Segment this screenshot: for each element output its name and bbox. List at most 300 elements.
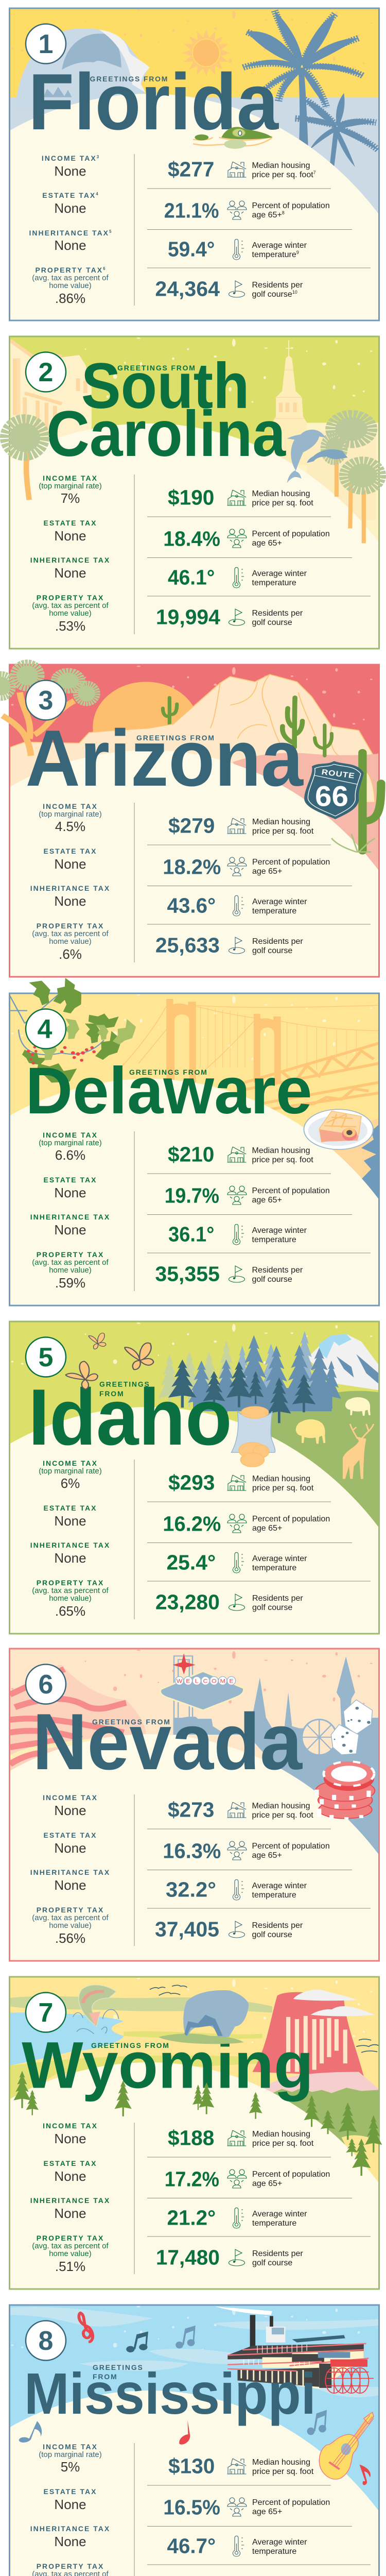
income tax: INCOME TAX — [43, 2122, 98, 2130]
icon: holly branch — [10, 976, 140, 1092]
tax column: .53% — [55, 618, 85, 634]
stat rows — [147, 158, 371, 301]
tax column — [30, 2122, 110, 2274]
icon: golf flag — [229, 609, 245, 625]
stat rows — [147, 2454, 371, 2576]
tax column: home value) — [49, 1594, 92, 1603]
property tax: PROPERTY TAX — [37, 1250, 104, 1259]
icon: house — [227, 2459, 246, 2474]
estate tax: ESTATE TAX — [43, 1831, 97, 1839]
winter temperature: 46.1° — [168, 566, 215, 589]
panel: Idaho — [9, 1321, 381, 1636]
golf label: Residents per — [252, 1266, 303, 1275]
tax column: None — [54, 893, 86, 909]
temperature label: temperature — [252, 1891, 296, 1900]
property tax: PROPERTY TAX — [37, 2234, 104, 2242]
tax column — [30, 474, 110, 634]
greeting: GREETINGS — [99, 1380, 150, 1388]
housing label: Median housing — [252, 161, 310, 170]
cream hill — [9, 2391, 381, 2576]
tax column: 6% — [61, 1476, 80, 1491]
tax column: None — [54, 1513, 86, 1529]
estate tax: ESTATE TAX — [43, 847, 97, 855]
number badge — [26, 1337, 66, 1377]
population label: age 65+ — [252, 211, 282, 219]
estate tax: ESTATE TAX — [42, 191, 96, 199]
tax column: (top marginal rate) — [39, 1139, 102, 1147]
number badge — [26, 1009, 66, 1049]
state name: South — [81, 350, 250, 422]
golf label: Residents per — [252, 2249, 303, 2258]
column divider — [134, 2443, 135, 2576]
number badge — [26, 680, 66, 720]
senior population: 16.5% — [163, 2496, 220, 2519]
greeting: GREETINGS FROM — [91, 2041, 170, 2049]
temperature label: Average winter — [252, 2210, 307, 2218]
senior population: 17.2% — [165, 2167, 219, 2191]
tax column: .6% — [59, 946, 82, 962]
tax column: (top marginal rate) — [39, 810, 102, 819]
icon: house — [227, 2130, 246, 2146]
icon: golf flag — [229, 1266, 245, 1282]
icon: alligator — [193, 127, 272, 149]
number badge: 4 — [38, 1014, 52, 1044]
estate tax: ESTATE TAX — [43, 2159, 97, 2167]
panel: Wyoming — [9, 1977, 382, 2291]
column divider — [134, 1460, 135, 1619]
number badge: 3 — [39, 686, 53, 716]
inheritance tax: INHERITANCE TAX — [30, 1541, 110, 1549]
background illustration: sky and steamboat — [9, 2305, 381, 2576]
population label: 8 — [282, 210, 285, 215]
housing label: price per sq. foot — [252, 499, 313, 507]
housing label: 7 — [313, 170, 316, 175]
housing label: Median housing — [252, 1475, 310, 1483]
population label: age 65+ — [252, 539, 282, 548]
panel frame — [9, 993, 379, 1306]
icon: welcome sign, dice and casino chips — [160, 1653, 375, 1819]
temperature label: temperature — [252, 2547, 296, 2556]
icon: house — [227, 818, 246, 834]
property tax: 6 — [103, 266, 106, 271]
estate tax: ESTATE TAX — [43, 519, 97, 527]
golf residents: 24,364 — [155, 277, 220, 301]
tax column: home value) — [49, 1266, 92, 1275]
tax column: None — [54, 528, 86, 544]
population label: Percent of population — [252, 1842, 330, 1851]
panel: Arizona — [0, 665, 381, 979]
background illustration: desert rocks, sun and cacti — [9, 665, 381, 979]
icon: joshua tree, saguaro and route 66 shield: 66 — [315, 780, 348, 812]
column divider — [134, 154, 135, 306]
winter temperature: 43.6° — [167, 893, 216, 917]
housing price: $130 — [168, 2454, 215, 2478]
tax column: .59% — [55, 1275, 85, 1291]
tax column: None — [54, 1550, 86, 1566]
tax column: home value) — [49, 2249, 92, 2258]
tax column: 7% — [61, 490, 80, 506]
column divider — [134, 2123, 135, 2274]
state name: Mississippi — [24, 2361, 316, 2426]
golf residents: 37,405 — [155, 1918, 219, 1941]
stat rows — [147, 1143, 371, 1286]
icon: house — [227, 1147, 246, 1162]
housing label: price per sq. foot — [252, 2467, 314, 2476]
background illustration: forest, mountain and wildlife — [9, 1321, 381, 1636]
housing label: Median housing — [252, 818, 310, 826]
housing price: $277 — [168, 158, 214, 181]
inheritance tax: INHERITANCE TAX — [30, 2196, 110, 2205]
icon: people — [227, 2498, 247, 2516]
stat rows — [147, 2126, 371, 2269]
icon: people — [227, 201, 247, 219]
temperature label: 9 — [296, 250, 299, 255]
tax column: None — [54, 2168, 86, 2184]
panel: Delaware — [9, 976, 381, 1308]
number badge — [26, 352, 66, 392]
temperature label: Average winter — [252, 569, 307, 578]
temperature label: Average winter — [252, 1882, 307, 1890]
icon: golf flag — [229, 937, 245, 954]
golf label: golf course — [252, 1930, 292, 1939]
senior population: 19.7% — [165, 1184, 219, 1208]
tax column: None — [54, 200, 86, 216]
population label: age 65+ — [252, 2179, 282, 2188]
inheritance tax: INHERITANCE TAX — [30, 884, 110, 892]
column divider — [134, 1131, 135, 1291]
tax column — [30, 1131, 110, 1291]
tax column: 4.5% — [55, 819, 85, 834]
icon: house — [227, 490, 246, 505]
panel: Mississippi — [9, 2305, 381, 2576]
state name: Florida — [28, 57, 279, 146]
icon: house — [227, 162, 246, 177]
population label: age 65+ — [252, 1524, 282, 1533]
greeting: GREETINGS FROM — [92, 1718, 171, 1726]
tax column: None — [54, 1185, 86, 1200]
cream hill — [9, 1407, 381, 1636]
winter temperature: 46.7° — [167, 2534, 216, 2557]
population label: Percent of population — [252, 1187, 330, 1195]
panel: South Carolina — [9, 336, 381, 651]
winter temperature: 21.2° — [167, 2206, 216, 2230]
tax column: None — [54, 163, 86, 179]
temperature label: Average winter — [252, 241, 307, 250]
cream hill — [9, 1079, 381, 1308]
number badge: 7 — [39, 1998, 53, 2028]
panel frame — [9, 2305, 379, 2576]
icon: music notes and guitar — [19, 2313, 374, 2485]
housing label: Median housing — [252, 2130, 310, 2139]
stat rows — [147, 814, 371, 957]
panel frame — [9, 665, 379, 977]
golf residents: 19,994 — [156, 605, 220, 629]
winter temperature: 25.4° — [167, 1551, 216, 1574]
winter temperature: 36.1° — [168, 1222, 214, 1246]
housing price: $188 — [168, 2126, 214, 2149]
senior population: 16.3% — [163, 1839, 221, 1863]
senior population: 18.2% — [163, 855, 221, 879]
estate tax: ESTATE TAX — [43, 2487, 97, 2496]
icon: welcome sign, dice and casino chips: O — [212, 1678, 217, 1684]
tax column — [29, 154, 112, 306]
background illustration: plains, lake, bison and Devils Tower — [9, 1977, 381, 2291]
tax column: None — [54, 1222, 86, 1238]
state name: Wyoming — [22, 2029, 313, 2103]
tax column: None — [54, 2206, 86, 2221]
tax column — [30, 1793, 110, 1946]
icon: welcome sign, dice and casino chips: C — [203, 1678, 208, 1684]
icon: thermometer — [233, 1552, 244, 1573]
inheritance tax: INHERITANCE TAX — [30, 1213, 110, 1221]
estate tax: 4 — [96, 192, 98, 196]
golf label: golf course — [252, 2259, 292, 2267]
tax column: (avg. tax as percent of — [32, 1913, 109, 1922]
tax column — [30, 1459, 110, 1619]
background illustration: suspension bridge and water — [9, 993, 381, 1308]
panel frame — [9, 336, 379, 649]
icon: welcome sign, dice and casino chips: W — [177, 1678, 183, 1684]
icon: thermometer — [233, 1224, 244, 1245]
icon: people — [227, 529, 247, 548]
temperature label: temperature — [252, 907, 296, 916]
population label: age 65+ — [252, 867, 282, 876]
state name: Carolina — [46, 398, 286, 470]
golf residents: 23,280 — [155, 1590, 220, 1614]
housing label: price per sq. foot — [252, 1484, 314, 1493]
golf label: Residents per — [252, 281, 303, 290]
icon: people — [227, 2170, 247, 2188]
tax column: None — [54, 856, 86, 872]
estate tax: ESTATE TAX — [43, 1176, 97, 1184]
inheritance tax: INHERITANCE TAX — [30, 1868, 110, 1876]
icon: thermometer — [233, 567, 244, 588]
icon: golf flag — [229, 1594, 245, 1611]
icon: golf flag — [229, 1921, 245, 1938]
cream hill — [9, 750, 381, 979]
income tax: INCOME TAX — [43, 802, 98, 810]
state name: Nevada — [32, 1697, 303, 1786]
inheritance tax: INHERITANCE TAX — [30, 2524, 110, 2533]
state name — [46, 350, 286, 470]
population label: Percent of population — [252, 1515, 330, 1523]
senior population: 16.2% — [163, 1512, 221, 1535]
greeting: FROM — [93, 2372, 117, 2381]
housing label: price per sq. foot — [252, 171, 313, 179]
tax column: (avg. tax as percent of — [32, 929, 109, 938]
tax column: .86% — [55, 291, 85, 306]
icon: thermometer — [233, 2536, 244, 2556]
housing price: $210 — [168, 1143, 214, 1166]
temperature label: Average winter — [252, 2538, 307, 2547]
icon: joshua tree, saguaro and route 66 shield: ROUTE — [321, 768, 356, 780]
icon: butterflies, potatoes, bison and elk — [64, 1329, 374, 1479]
tax column: (avg. tax as percent of — [32, 1586, 109, 1595]
icon: golf flag — [229, 2249, 245, 2266]
housing price: $293 — [168, 1470, 215, 1494]
column divider — [134, 474, 135, 634]
stat rows — [147, 485, 371, 629]
golf label: Residents per — [252, 609, 303, 618]
column divider — [134, 803, 135, 962]
property tax: PROPERTY TAX — [37, 594, 104, 602]
panel frame — [9, 8, 379, 320]
state name: Arizona — [26, 714, 304, 803]
income tax: INCOME TAX — [43, 474, 98, 482]
temperature label: temperature — [252, 250, 296, 259]
tax column: (avg. tax as percent of — [32, 274, 109, 282]
housing label: Median housing — [252, 2458, 310, 2467]
property tax: PROPERTY TAX — [37, 1906, 104, 1914]
winter temperature: 32.2° — [166, 1877, 216, 1901]
temperature label: temperature — [252, 1235, 296, 1244]
housing label: Median housing — [252, 489, 310, 498]
icon: people — [227, 857, 247, 876]
tax column: None — [54, 1803, 86, 1818]
tax column: 6.6% — [55, 1147, 85, 1163]
panel: Nevada — [9, 1649, 381, 1963]
golf label: golf course — [252, 618, 292, 627]
housing label: price per sq. foot — [252, 1811, 313, 1820]
population label: age 65+ — [252, 1196, 282, 1205]
tax column: home value) — [49, 281, 92, 290]
inheritance tax: 5 — [109, 229, 112, 234]
icon: thermometer — [233, 895, 244, 916]
temperature label: Average winter — [252, 1226, 307, 1235]
housing price: $279 — [168, 814, 215, 838]
icon: thermometer — [233, 1879, 244, 1900]
greeting: GREETINGS — [93, 2363, 144, 2371]
income tax: INCOME TAX — [43, 2443, 98, 2451]
tax column: .65% — [55, 1603, 85, 1619]
housing label: price per sq. foot — [252, 1156, 313, 1164]
income tax: INCOME TAX — [43, 1459, 98, 1467]
income tax: INCOME TAX — [43, 1793, 98, 1802]
tax column: (top marginal rate) — [39, 1467, 102, 1476]
senior population: 21.1% — [164, 199, 219, 223]
income tax: INCOME TAX — [42, 154, 97, 162]
tax column: (top marginal rate) — [39, 482, 102, 490]
number badge: 6 — [39, 1670, 53, 1700]
tax column: .56% — [55, 1930, 85, 1946]
tax column: None — [54, 565, 86, 581]
property tax: PROPERTY TAX — [37, 2562, 104, 2570]
tax column: .51% — [55, 2259, 85, 2274]
tax column: None — [54, 1840, 86, 1856]
population label: Percent of population — [252, 2170, 330, 2179]
number badge: 2 — [39, 358, 53, 387]
golf residents: 25,633 — [155, 934, 220, 957]
state name: Delaware — [26, 1054, 312, 1128]
greeting: GREETINGS FROM — [90, 75, 168, 83]
number badge — [26, 24, 66, 64]
icon: welcome sign, dice and casino chips: E — [229, 1678, 234, 1684]
golf label: Residents per — [252, 1921, 303, 1930]
population label: age 65+ — [252, 2507, 282, 2516]
background illustration: beach, wave, sun and palms — [7, 8, 381, 323]
icon: thermometer — [233, 2208, 244, 2228]
panel: Florida — [7, 8, 381, 323]
panel frame — [9, 1649, 379, 1961]
panel frame — [9, 1321, 379, 1634]
tax column: None — [54, 2131, 86, 2146]
cream hill — [9, 1734, 381, 1963]
golf label: Residents per — [252, 1594, 303, 1603]
icon: house — [227, 1475, 246, 1490]
population label: Percent of population — [252, 858, 330, 867]
winter temperature: 59.4° — [168, 237, 215, 261]
icon: welcome sign, dice and casino chips: L — [195, 1678, 199, 1684]
icon: people — [227, 1514, 247, 1533]
number badge — [26, 1993, 66, 2032]
greeting: GREETINGS FROM — [117, 364, 196, 372]
number badge: 1 — [39, 29, 53, 59]
cream hill — [9, 94, 381, 323]
tax column: (top marginal rate) — [39, 2450, 102, 2459]
population label: age 65+ — [252, 1851, 282, 1860]
panel frame — [9, 1977, 379, 2289]
golf residents: 17,480 — [156, 2245, 220, 2269]
income tax: 3 — [97, 155, 99, 159]
greeting: GREETINGS FROM — [136, 734, 215, 742]
number badge — [26, 1664, 66, 1704]
temperature label: Average winter — [252, 1554, 307, 1563]
icon: joshua tree, saguaro and route 66 shield — [0, 666, 381, 852]
tax column: home value) — [49, 937, 92, 946]
cream hill — [9, 423, 381, 651]
property tax: PROPERTY TAX — [37, 1579, 104, 1587]
tax column: None — [54, 2497, 86, 2512]
icon: golf flag — [229, 281, 245, 297]
icon: welcome sign, dice and casino chips: E — [186, 1678, 190, 1684]
background illustration: Charleston buildings and steeple — [9, 336, 381, 651]
population label: Percent of population — [252, 530, 330, 538]
temperature label: temperature — [252, 2219, 296, 2228]
income tax: INCOME TAX — [43, 1131, 98, 1139]
golf label: 10 — [292, 290, 297, 295]
housing label: price per sq. foot — [252, 827, 314, 836]
golf label: golf course — [252, 290, 292, 299]
housing label: price per sq. foot — [252, 2139, 314, 2148]
population label: Percent of population — [252, 2498, 330, 2507]
senior population: 18.4% — [163, 527, 220, 550]
property tax: PROPERTY TAX — [35, 266, 103, 274]
temperature label: temperature — [252, 1564, 296, 1572]
housing label: Median housing — [252, 1146, 310, 1155]
temperature label: temperature — [252, 579, 296, 587]
housing price: $190 — [168, 485, 214, 509]
tax column: 5% — [61, 2459, 80, 2475]
number badge: 8 — [39, 2326, 53, 2356]
state name: Idaho — [28, 1372, 232, 1462]
housing label: Median housing — [252, 1802, 310, 1810]
tax column: None — [54, 1877, 86, 1893]
icon: people — [227, 1841, 247, 1860]
tax column: None — [54, 238, 86, 253]
background illustration: striped rocks and Las Vegas skyline — [9, 1649, 381, 1963]
icon: peach pie — [304, 1109, 373, 1149]
icon: thermometer — [233, 239, 244, 260]
inheritance tax: INHERITANCE TAX — [30, 556, 110, 564]
tax column: (avg. tax as percent of — [32, 601, 109, 610]
housing price: $273 — [168, 1798, 214, 1822]
stat rows — [147, 1798, 371, 1941]
stat rows — [147, 1470, 371, 1614]
tax column: home value) — [49, 609, 92, 618]
cream hill — [9, 2062, 381, 2291]
tax column — [30, 2443, 110, 2576]
tax column: None — [54, 2534, 86, 2549]
